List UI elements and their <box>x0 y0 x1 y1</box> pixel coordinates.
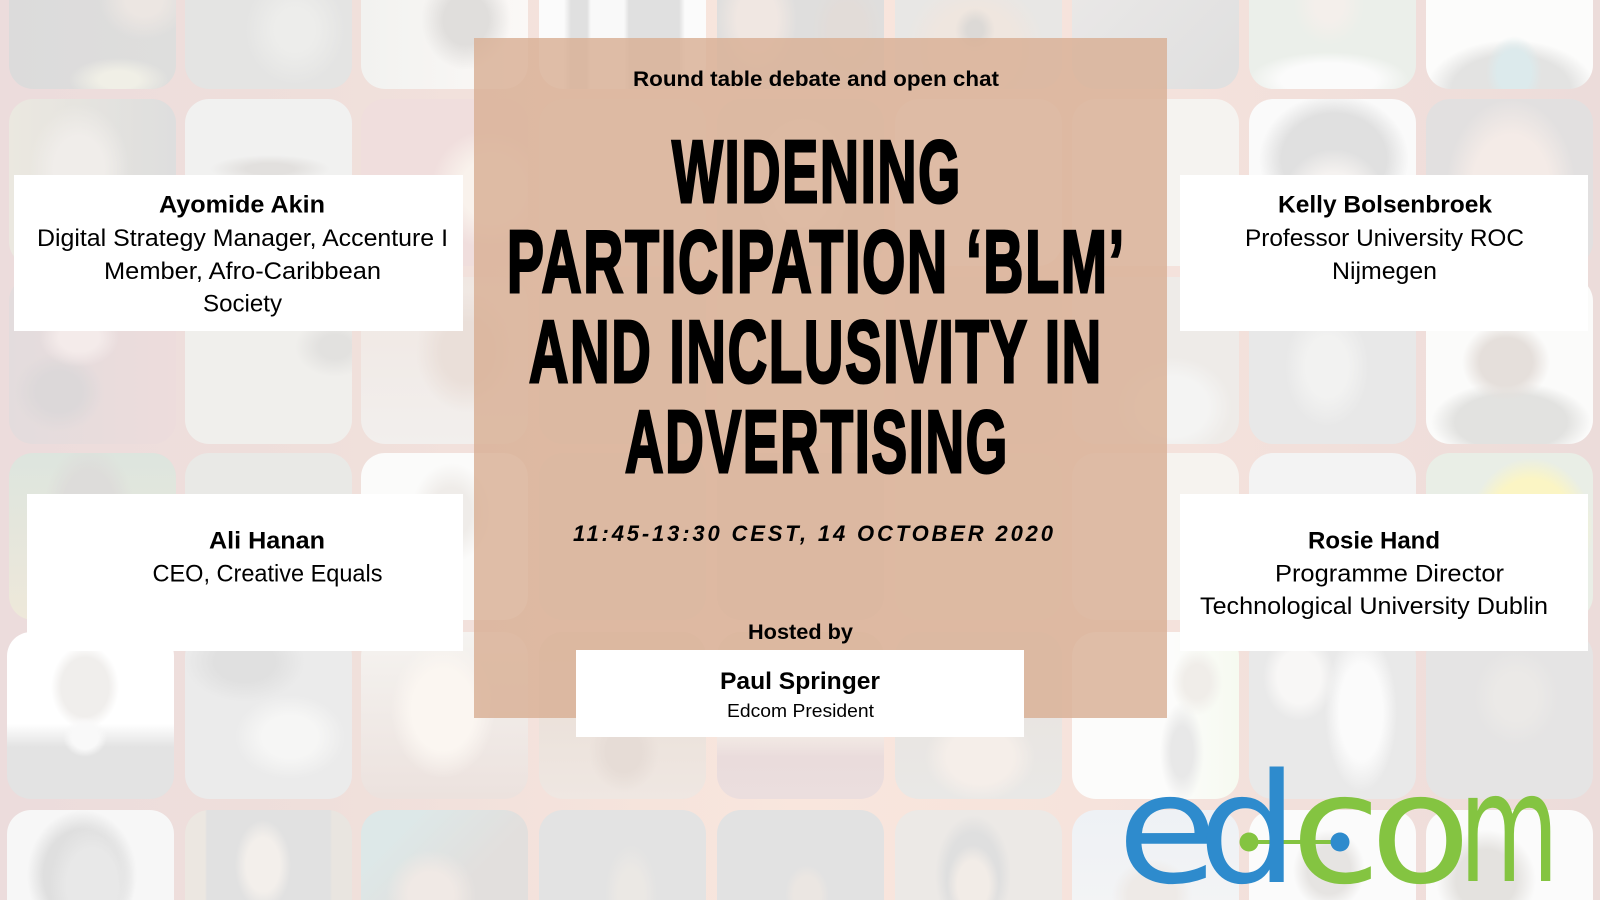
title: ADVERTISING <box>625 392 1009 491</box>
card: speaker Ali Hanan: CEO, Creative Equals <box>152 561 382 588</box>
card: speaker Ayomide Akin: Society <box>203 291 283 318</box>
panel: central translucent card <box>474 38 1167 718</box>
photo: person with yellow helmet <box>1426 453 1593 620</box>
photo: girl in sailor uniform <box>1249 0 1416 89</box>
card: speaker Kelly Bolsenbroek: Kelly Bolsenbroek <box>1278 192 1492 219</box>
card: host Paul Springer <box>576 650 1024 737</box>
photo: man brow close-up <box>185 99 352 266</box>
photo: woman with glasses <box>1072 632 1239 799</box>
photo: older man forehead <box>9 99 176 266</box>
photo: man by teal wall <box>9 453 176 620</box>
card: speaker Rosie Hand <box>1180 494 1588 651</box>
title: PARTICIPATION ‘BLM’ <box>507 212 1126 311</box>
date and time: 11:45-13:30 CEST, 14 OCTOBER 2020 <box>573 521 1054 546</box>
photo: blonde woman behind panel <box>717 99 884 266</box>
photo: woman with teal curls <box>361 810 528 900</box>
title: AND INCLUSIVITY IN <box>529 302 1103 401</box>
photo: boy <box>539 632 706 799</box>
photo: bearded holy man <box>185 810 352 900</box>
photo: fur hat portrait <box>1072 99 1239 266</box>
photo: laughing woman <box>361 632 528 799</box>
card: speaker Ali Hanan <box>27 494 463 651</box>
photo: woman behind panel <box>539 99 706 266</box>
photo: man in suit on white <box>7 632 174 799</box>
photo: bearded old man close-up <box>185 277 352 444</box>
photo: man with round glasses <box>185 632 352 799</box>
photo: shirtless man <box>895 0 1062 89</box>
photo: woman with braids on white <box>7 810 174 900</box>
eyebrow: round table debate: Round table debate and open chat <box>633 68 999 91</box>
photo: man in white room <box>1249 810 1416 900</box>
photo: man in shadow <box>539 810 706 900</box>
card: host Paul Springer: Edcom President <box>727 701 874 721</box>
photo: two girls <box>1249 632 1416 799</box>
card: speaker Ayomide Akin <box>14 175 463 331</box>
card: speaker Ayomide Akin: Digital Strategy Manager, Accenture I <box>37 225 448 252</box>
photo: portrait behind panel <box>895 453 1062 620</box>
card: speaker Rosie Hand: Programme Director <box>1275 561 1504 588</box>
photo: man smoking <box>1426 632 1593 799</box>
card: speaker Kelly Bolsenbroek <box>1180 175 1588 331</box>
logo: edcom <box>1117 740 1559 900</box>
card: host Paul Springer: Paul Springer <box>720 668 880 695</box>
photo: man with aviators <box>1426 810 1593 900</box>
photo: woman with glasses <box>1072 810 1239 900</box>
photo: man in suit and tie <box>1426 0 1593 89</box>
card: speaker Ayomide Akin: Member, Afro-Caribbean <box>104 258 381 285</box>
photo: portrait behind panel <box>717 277 884 444</box>
photo: portrait behind panel <box>539 453 706 620</box>
photo: woman with long hair <box>895 632 1062 799</box>
photo: bearded man <box>361 0 528 89</box>
photo: blonde portrait <box>1072 453 1239 620</box>
photo: curly hair portrait <box>1249 453 1416 620</box>
photo: portrait behind panel <box>717 453 884 620</box>
photo: light portrait behind panel <box>895 99 1062 266</box>
photo: woman on white <box>361 453 528 620</box>
photo: woman in wine top <box>717 632 884 799</box>
card: speaker Ayomide Akin: Ayomide Akin <box>159 192 325 219</box>
photo: woman with braids <box>1249 99 1416 266</box>
photo: dark portrait <box>1072 0 1239 89</box>
photo: couple smiling <box>717 0 884 89</box>
photo: man from behind <box>185 453 352 620</box>
card: speaker Ali Hanan: Ali Hanan <box>209 528 325 554</box>
card: speaker Kelly Bolsenbroek: Professor University ROC <box>1245 225 1524 252</box>
photo: woman with sunglasses <box>895 810 1062 900</box>
photo: man in pale jacket <box>1072 277 1239 444</box>
photo: girl with tiara <box>717 810 884 900</box>
photo: woman with dark hair <box>9 0 176 89</box>
photo: woman with dark hair close-up <box>1426 99 1593 266</box>
photo: bearded man with hat <box>1426 277 1593 444</box>
photo: portrait behind panel <box>895 277 1062 444</box>
card: speaker Rosie Hand: Rosie Hand <box>1308 528 1440 554</box>
photo: woman lying with red hair <box>9 277 176 444</box>
hosted by label: Hosted by <box>748 621 853 644</box>
photo: man with dark eyes <box>1249 277 1416 444</box>
photo: man with cap <box>361 277 528 444</box>
photo: old man profile <box>185 0 352 89</box>
title: WIDENING <box>672 122 962 221</box>
photo: man in black jacket <box>539 0 706 89</box>
card: speaker Kelly Bolsenbroek: Nijmegen <box>1332 258 1437 285</box>
photo: portrait behind panel <box>539 277 706 444</box>
photo: child with red dotted background <box>361 99 528 266</box>
title <box>507 122 1126 491</box>
card: speaker Rosie Hand: Technological University Dublin <box>1200 593 1548 620</box>
